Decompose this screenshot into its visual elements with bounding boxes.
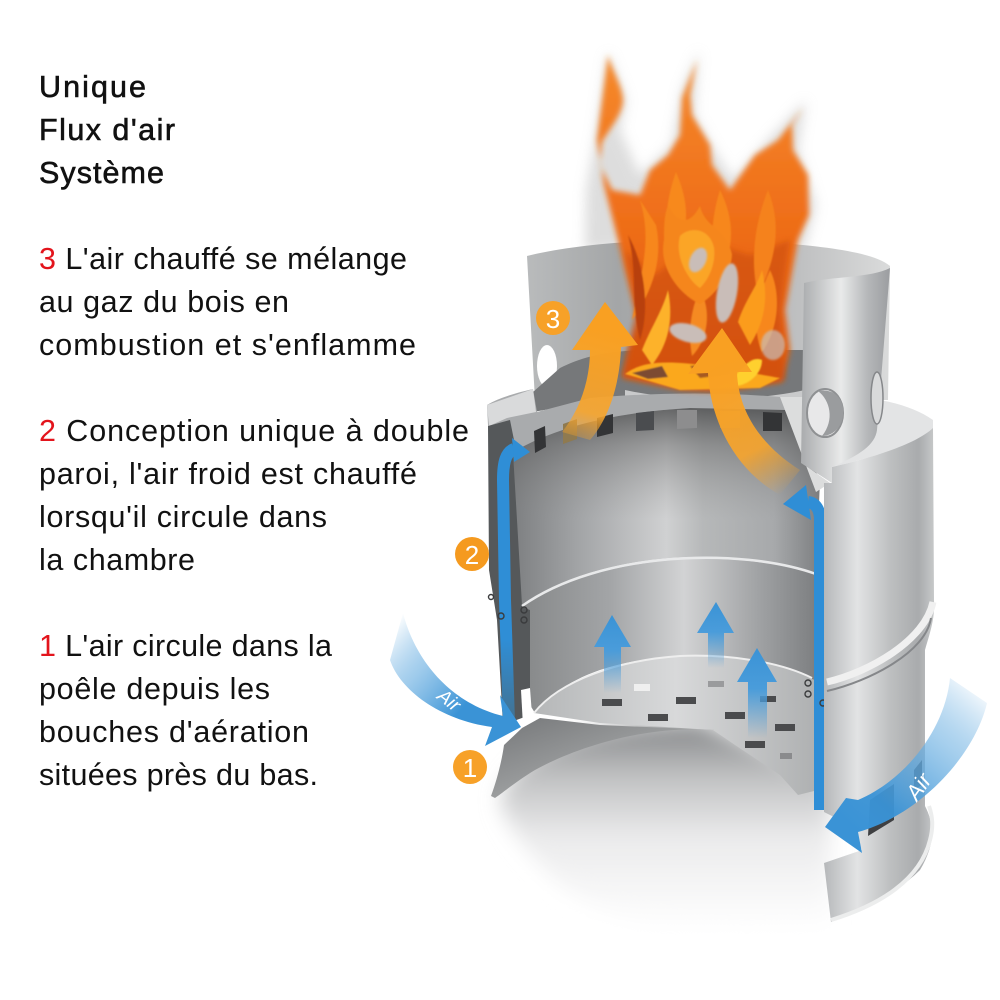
bowl interior <box>533 350 810 412</box>
text block: step 2: la chambre <box>39 543 195 577</box>
pot stand right front panel <box>801 268 890 483</box>
vent holes row <box>534 410 782 453</box>
text block: step 1 <box>39 629 332 792</box>
text block: step 3 <box>39 242 416 362</box>
chamber seam circles <box>488 594 826 706</box>
flame tongues <box>625 172 780 390</box>
text block: step 1: poêle depuis les <box>39 672 270 706</box>
text block: title <box>39 70 175 190</box>
text block: step 2: lorsqu'il circule dans <box>39 500 327 534</box>
body rim <box>827 602 933 682</box>
illustration: wood stove cutaway <box>390 50 987 939</box>
arrow: orange right <box>688 328 800 495</box>
text block: step 2: paroi, l'air froid est chauffé <box>39 457 417 491</box>
right outer body <box>824 428 934 922</box>
arrow: air intake right <box>825 678 987 853</box>
text block: title: Flux d'air <box>39 113 175 147</box>
left blue channel <box>503 449 514 722</box>
white vent gap <box>521 688 532 726</box>
top rim of back shell <box>812 395 933 467</box>
grate floor <box>534 656 818 795</box>
badge: 2 <box>455 537 489 571</box>
arrows: blue upward <box>594 602 777 738</box>
text block: step 1: bouches d'aération <box>39 715 309 749</box>
inner chamber upper wall <box>513 408 820 605</box>
badge: 1: 1 <box>463 753 477 783</box>
arrow: orange left <box>562 302 638 440</box>
flame halo <box>585 50 816 250</box>
panel hole left <box>537 345 557 387</box>
hot wood pieces <box>667 245 785 360</box>
pot stand back panel <box>527 240 890 400</box>
panel holes <box>807 372 883 437</box>
text block: step 1: 1 L'air circule dans la <box>39 629 332 663</box>
arrow: air intake left: Air <box>432 685 465 717</box>
right blue channel <box>808 502 820 810</box>
arrow: air intake right: Air <box>899 767 937 807</box>
text block: title: Unique <box>39 70 146 104</box>
flame darker base <box>622 240 790 388</box>
text block: step 3: combustion et s'enflamme <box>39 328 416 362</box>
base rim <box>831 806 932 920</box>
text block: step 3: 3 L'air chauffé se mélange <box>39 242 407 276</box>
ground shadow <box>500 722 830 939</box>
text block: step 2: 2 Conception unique à double <box>39 414 469 448</box>
badge: 2: 2 <box>465 540 479 570</box>
top plate <box>487 389 815 480</box>
main flame <box>597 55 809 392</box>
vent slots body <box>868 760 922 836</box>
arrow: air intake left <box>390 613 521 746</box>
light plate right <box>780 397 830 492</box>
front bottom-left shell piece <box>491 718 715 798</box>
badge: 3 <box>536 301 570 335</box>
grate slots <box>602 681 795 759</box>
text block: title: Système <box>39 156 164 190</box>
badge: 1 <box>453 750 487 784</box>
text block: step 2 <box>39 414 469 577</box>
text block: step 1: situées près du bas. <box>39 758 318 792</box>
chamber lower wall <box>522 559 816 713</box>
text block: step 3: au gaz du bois en <box>39 285 289 319</box>
chamber shell dark gap left <box>488 420 530 725</box>
badge: 3: 3 <box>546 304 560 334</box>
